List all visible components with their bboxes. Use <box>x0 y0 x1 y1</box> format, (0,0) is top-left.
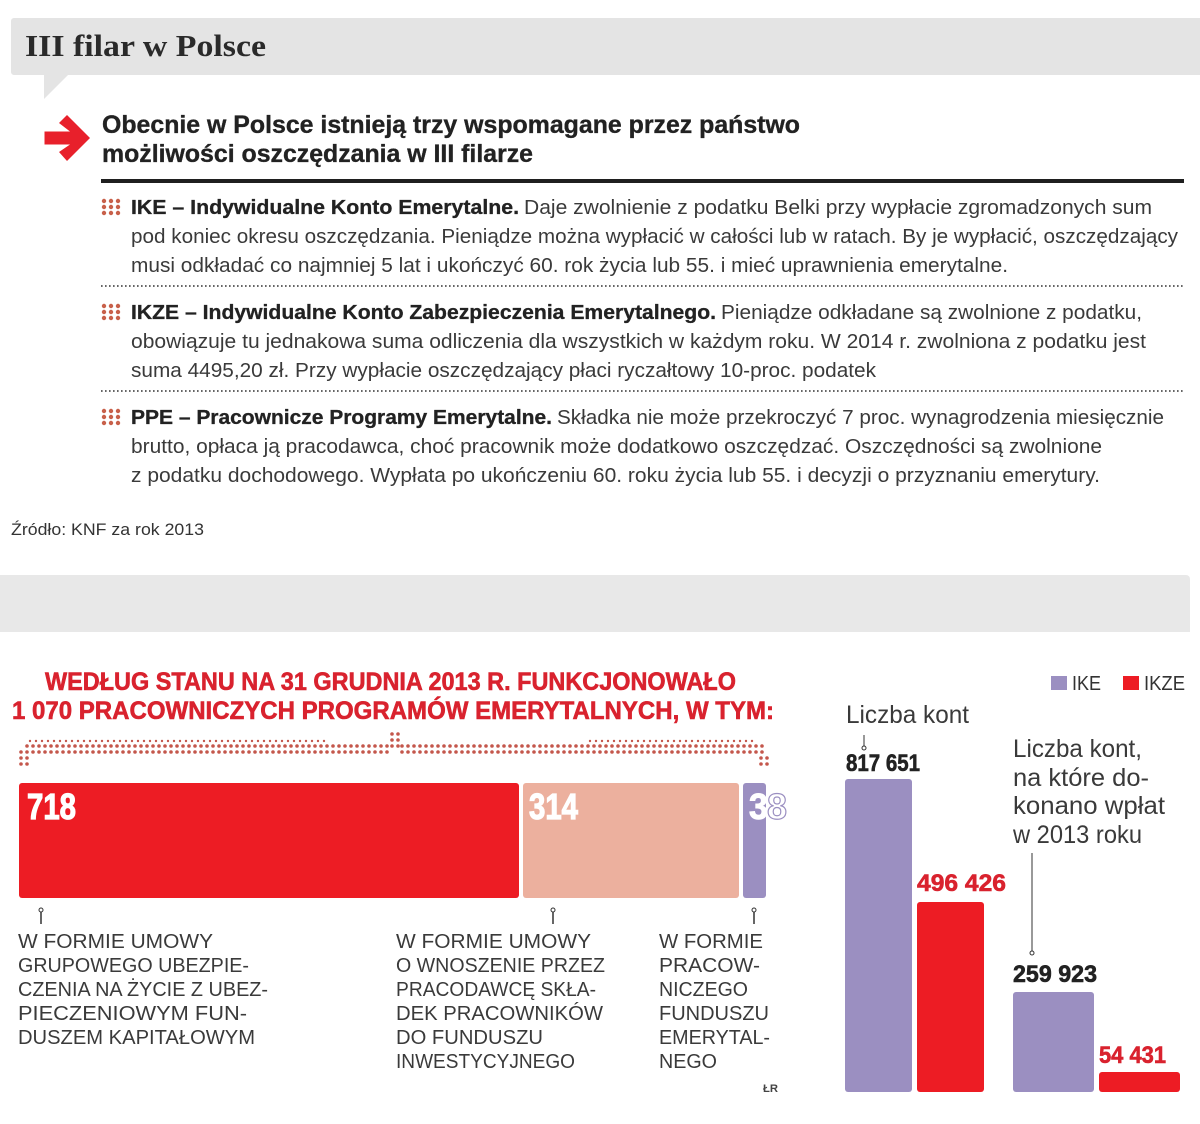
chart: accounts with contributions in 2013: na które do- <box>1013 764 1149 792</box>
label: 718 group insurance: CZENIA NA ŻYCIE Z UBEZ- <box>18 978 268 1001</box>
label: 38 employee pension fund: NICZEGO <box>659 979 748 1001</box>
label: 718 group insurance: W FORMIE UMOWY <box>18 931 213 953</box>
text block: IKE <box>102 197 1178 277</box>
text block: PPE <box>102 407 1164 487</box>
pointer <box>862 735 866 750</box>
text block: IKE: IKE – Indywidualne Konto Emerytalne. <box>131 197 519 219</box>
text block: IKZE: IKZE – Indywidualne Konto Zabezpieczenia Emerytalnego. <box>131 302 716 324</box>
icon: red arrow <box>44 115 90 161</box>
heading: three state-supported options <box>102 111 800 168</box>
label: 314 investment fund contributions: O WNOSZENIE PRZEZ <box>396 955 605 977</box>
bar: 38: 8 <box>767 786 787 827</box>
chart: accounts with contributions in 2013: konano wpłat <box>1013 792 1165 820</box>
text block: PPE: PPE – Pracownicze Programy Emerytalne. <box>131 407 552 429</box>
chart: number of accounts: 496 426 <box>917 870 1006 897</box>
chart: number of accounts: 817 651 <box>846 750 920 777</box>
bar: 718 <box>19 783 519 898</box>
label: 314 investment fund contributions <box>396 931 605 1073</box>
text block: IKZE: Pieniądze odkładane są zwolnione z podatku, <box>721 302 1142 324</box>
legend: IKE <box>1072 673 1101 695</box>
label: 38 employee pension fund <box>659 931 770 1073</box>
label: 38 employee pension fund: PRACOW- <box>659 955 760 977</box>
source note: Źródło: KNF za rok 2013 <box>11 520 204 539</box>
bar: 38: 3 <box>749 786 768 827</box>
label: 314 investment fund contributions: DO FUNDUSZU <box>396 1027 543 1049</box>
heading: red PPE statement: 1 070 PRACOWNICZYCH PROGRAMÓW EMERYTALNYCH, W TYM: <box>12 695 774 725</box>
chart: accounts with contributions in 2013: 54 431 <box>1099 1042 1166 1069</box>
pointer: 38 <box>752 908 756 924</box>
title: III filar w Polsce <box>25 28 266 63</box>
author credit: ŁR <box>763 1083 778 1095</box>
chart: number of accounts <box>845 701 1006 1092</box>
text block: IKE: musi odkładać co najmniej 5 lat i ukończyć 60. rok życia lub 55. i mieć uprawnienia emerytalne. <box>131 255 1008 277</box>
pointer: 718 <box>39 908 43 924</box>
label: 314 investment fund contributions: PRACODAWCĘ SKŁA- <box>396 979 596 1001</box>
heading: red PPE statement <box>12 668 774 725</box>
label: 718 group insurance: DUSZEM KAPITAŁOWYM <box>18 1027 255 1049</box>
chart: accounts with contributions in 2013: w 2013 roku <box>1012 821 1142 849</box>
chart: accounts with contributions in 2013 <box>1012 735 1180 1092</box>
text block: PPE: Składka nie może przekroczyć 7 proc. wynagrodzenia miesięcznie <box>557 407 1164 429</box>
chart: accounts with contributions in 2013: Liczba kont, <box>1013 735 1142 763</box>
label: 718 group insurance <box>18 931 268 1049</box>
bar: 718: 718 <box>27 786 76 827</box>
icon: IKZE bullet dots <box>102 304 120 320</box>
chart: PPE stacked bar <box>19 783 787 898</box>
label: 38 employee pension fund: FUNDUSZU <box>659 1003 769 1025</box>
label: 718 group insurance: PIECZENIOWYM FUN- <box>18 1003 247 1025</box>
label: 38 employee pension fund: EMERYTAL- <box>659 1027 770 1049</box>
pointer: 314 <box>551 908 555 924</box>
legend: IKZE <box>1144 673 1185 695</box>
icon: PPE bullet dots <box>102 409 120 425</box>
text block: IKZE: suma 4495,20 zł. Przy wypłacie oszczędzający płaci ryczałtowy 10-proc. podatek <box>131 360 877 382</box>
text block: PPE: brutto, opłaca ją pracodawca, choć pracownik może dodatkowo oszczędzać. Oszczędności są zwolnione <box>131 436 1102 458</box>
label: 718 group insurance: GRUPOWEGO UBEZPIE- <box>18 955 249 977</box>
chart: number of accounts: Liczba kont <box>846 701 969 729</box>
text block: IKE: pod koniec okresu oszczędzania. Pieniądze można wypłacić w całości lub w ratach. By je wypłacić, oszczędzający <box>131 226 1178 248</box>
bar: 314: 314 <box>529 786 578 827</box>
bar: 38 <box>743 783 787 898</box>
label: 38 employee pension fund: NEGO <box>659 1051 717 1073</box>
panel: title banner <box>11 18 1200 99</box>
heading: red PPE statement: WEDŁUG STANU NA 31 GRUDNIA 2013 R. FUNKCJONOWAŁO <box>45 668 736 696</box>
chart: accounts with contributions in 2013: 259 923 <box>1013 961 1097 988</box>
heading: three state-supported options: możliwości oszczędzania w III filarze <box>102 140 533 168</box>
label: 38 employee pension fund: W FORMIE <box>659 931 763 953</box>
dotted brace <box>21 734 767 766</box>
text block: PPE: z podatku dochodowego. Wypłata po ukończeniu 60. roku życia lub 55. i decyzji o przyznaniu emerytury. <box>131 465 1100 487</box>
panel: empty grey banner <box>0 575 1190 632</box>
label: 314 investment fund contributions: W FORMIE UMOWY <box>396 931 591 953</box>
pointer <box>1030 853 1034 955</box>
text block: IKZE <box>102 302 1146 382</box>
label: 314 investment fund contributions: DEK PRACOWNIKÓW <box>396 1002 603 1025</box>
text block: IKZE: obowiązuje tu jednakowa suma odliczenia dla wszystkich w każdym roku. W 2014 r. zwolniona z podatku jest <box>131 331 1146 353</box>
text block: IKE: Daje zwolnienie z podatku Belki przy wypłacie zgromadzonych sum <box>524 197 1152 219</box>
icon: IKE bullet dots <box>102 199 120 215</box>
legend <box>1051 673 1185 695</box>
label: 314 investment fund contributions: INWESTYCYJNEGO <box>396 1051 575 1073</box>
bar: 314 <box>523 783 739 898</box>
heading: three state-supported options: Obecnie w Polsce istnieją trzy wspomagane przez państwo <box>102 111 800 139</box>
